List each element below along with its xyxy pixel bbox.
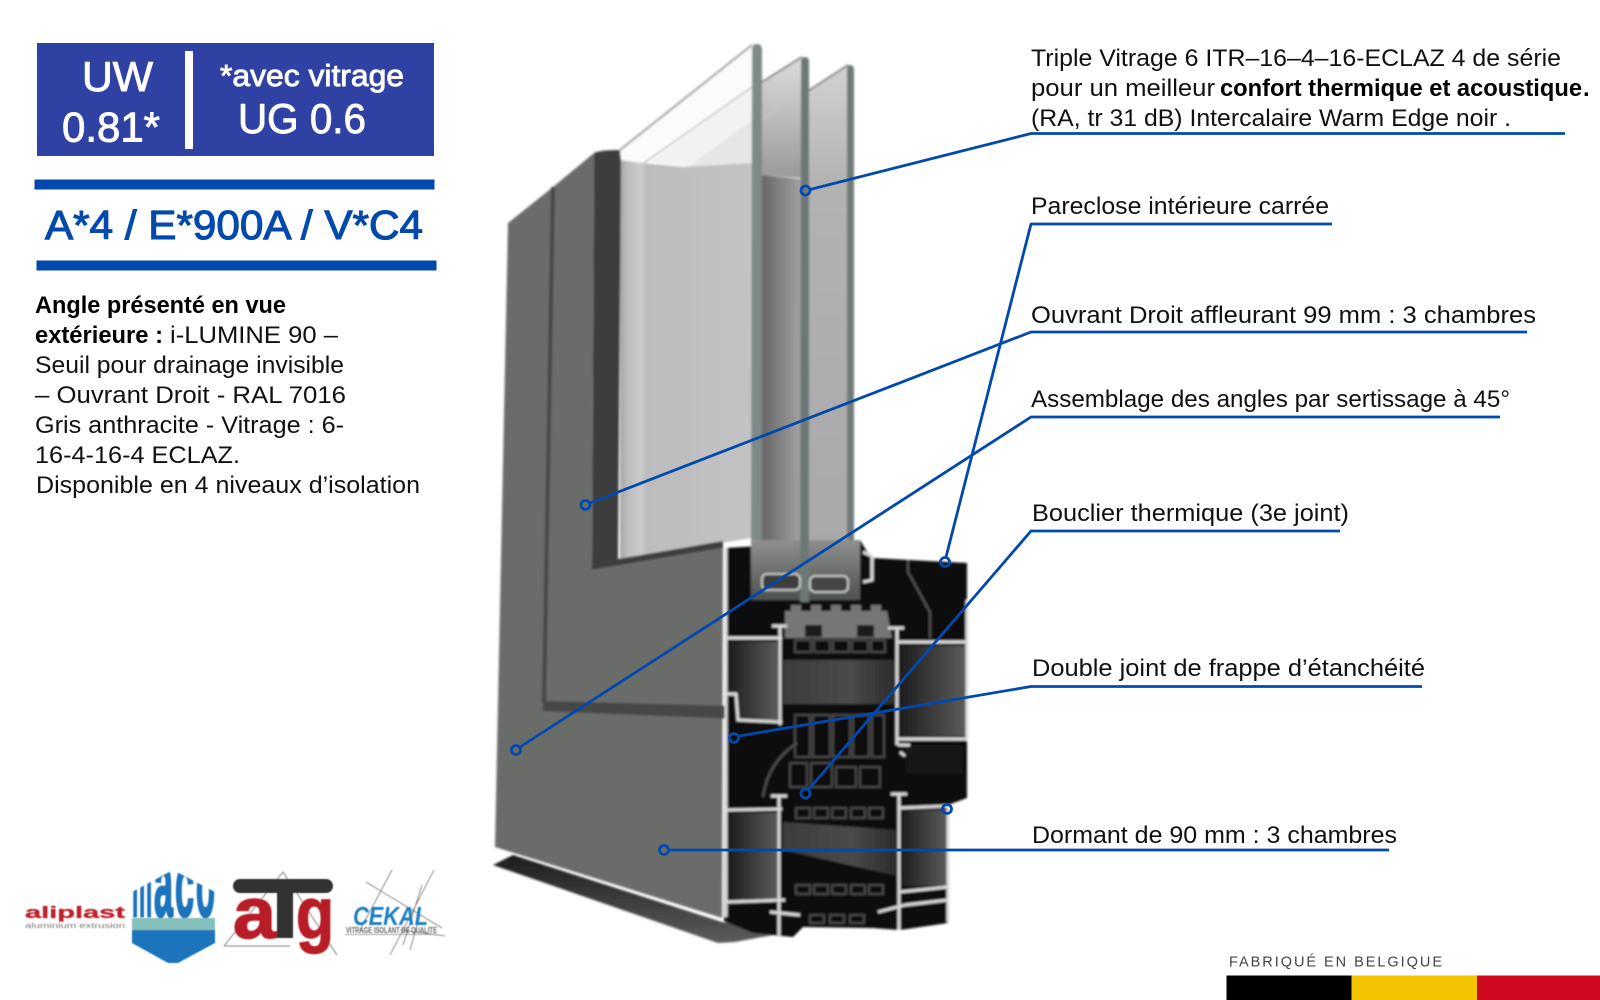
leader line [590,332,1527,503]
background: UW box [37,43,434,156]
logo: CEKAL: VITRAGE ISOLANT DE QUALITE [346,926,437,935]
leader line [810,134,1565,190]
logo: maco: c [175,832,194,936]
text: Bouclier thermique (3e joint) [1032,500,1349,527]
divider [185,51,193,149]
logo: aliplast: aluminium extrusion [25,921,125,930]
callout: sash [581,302,1536,510]
callout: glazing bead [940,193,1332,566]
callout: corner assembly [512,386,1510,754]
text: Dormant de 90 mm : 3 chambres [1032,822,1397,849]
logo: aliplast: aliplast [25,903,126,922]
footer: made in Belgium [1226,954,1600,1000]
callout: triple glazing [801,45,1590,195]
leader lines [739,686,1422,736]
profile walls [726,548,967,935]
logo: maco [131,871,216,964]
text block: description [35,292,420,499]
text: Double joint de frappe d’étanchéité [1032,655,1425,682]
marker right [942,804,952,814]
logos [24,870,446,964]
text: UW value [62,53,160,150]
text: Pareclose intérieure carrée [1031,193,1329,220]
text block: description: – Ouvrant Droit - RAL 7016 [35,382,346,409]
text block: description: extérieure : [35,322,163,349]
frame reveal [592,150,723,570]
callout: thermal shield [801,500,1349,798]
text: Triple Vitrage 6 ITR–16–4–16-ECLAZ 4 de série [1031,45,1561,72]
marker [801,789,810,798]
text: Assemblage des angles par sertissage à 45° [1031,386,1510,413]
marker [512,746,520,754]
logo: maco: m [132,832,152,936]
marker [940,558,950,566]
lower chambers [729,813,778,900]
text block: description: Angle présenté en vue [35,292,286,319]
text block: description: Seuil pour drainage invisible [35,352,344,379]
text: glazing UG value [220,58,404,142]
arc [763,743,797,797]
text: pour un meilleur [1031,75,1215,102]
heading: classification: A*4 / E*900A / V*C4 [45,202,423,248]
illustration: window profile cross-section [493,44,967,943]
callout: double seal [730,655,1425,814]
frame face [495,151,723,918]
rule: bottom [36,260,436,270]
glass panes [620,44,854,600]
logo: maco: a [154,832,173,936]
logo: CEKAL: CEKAL [353,901,428,931]
marker left [730,734,738,742]
leader line [669,849,1389,851]
text: Ouvrant Droit affleurant 99 mm : 3 chambres [1031,302,1536,329]
gasket [785,605,892,638]
label: FABRIQUÉ EN BELGIQUE [1229,954,1442,970]
upper chambers [729,642,778,720]
panel: thermal performance [37,43,434,156]
rule: top [34,180,434,190]
text: UW value: 0.81* [62,104,160,150]
text [1031,45,1590,132]
thermal cells [790,640,885,923]
leader line [520,417,1500,747]
text: glazing UG value: UG 0.6 [238,95,366,142]
sash groove [544,187,553,703]
flag [1226,976,1600,1000]
logo: CEKAL [345,870,445,955]
text: (RA, tr 31 dB) Intercalaire Warm Edge noir . [1031,105,1511,132]
text block: description: Disponible en 4 niveaux d’isolation [36,472,420,499]
glass foot [751,540,860,600]
logo: aliplast [25,903,126,930]
text block: description: Gris anthracite - Vitrage : 6- [35,412,344,439]
marker [660,846,668,854]
floor shadow [493,855,800,943]
profile section [724,540,967,937]
leader line [946,224,1332,557]
text: glazing UG value: *avec vitrage [220,58,404,93]
logo: ATG: a [233,874,277,954]
text block: description: 16-4-16-4 ECLAZ. [35,442,240,469]
logo: ATG: g [296,874,334,954]
marker [581,500,590,510]
text: confort thermique et acoustique [1220,75,1582,102]
leader line [809,531,1340,789]
callout: frame [660,822,1397,854]
sash bottom band [543,701,735,719]
panel: air water wind rating [34,180,436,270]
text: . [1583,75,1590,102]
text block: description: i-LUMINE 90 – [170,322,339,349]
text: UW value: UW [82,53,153,100]
marker [801,186,810,195]
logo: ATG [224,872,337,955]
top chamber diagonal [908,560,930,638]
logo: maco: o [196,832,215,936]
